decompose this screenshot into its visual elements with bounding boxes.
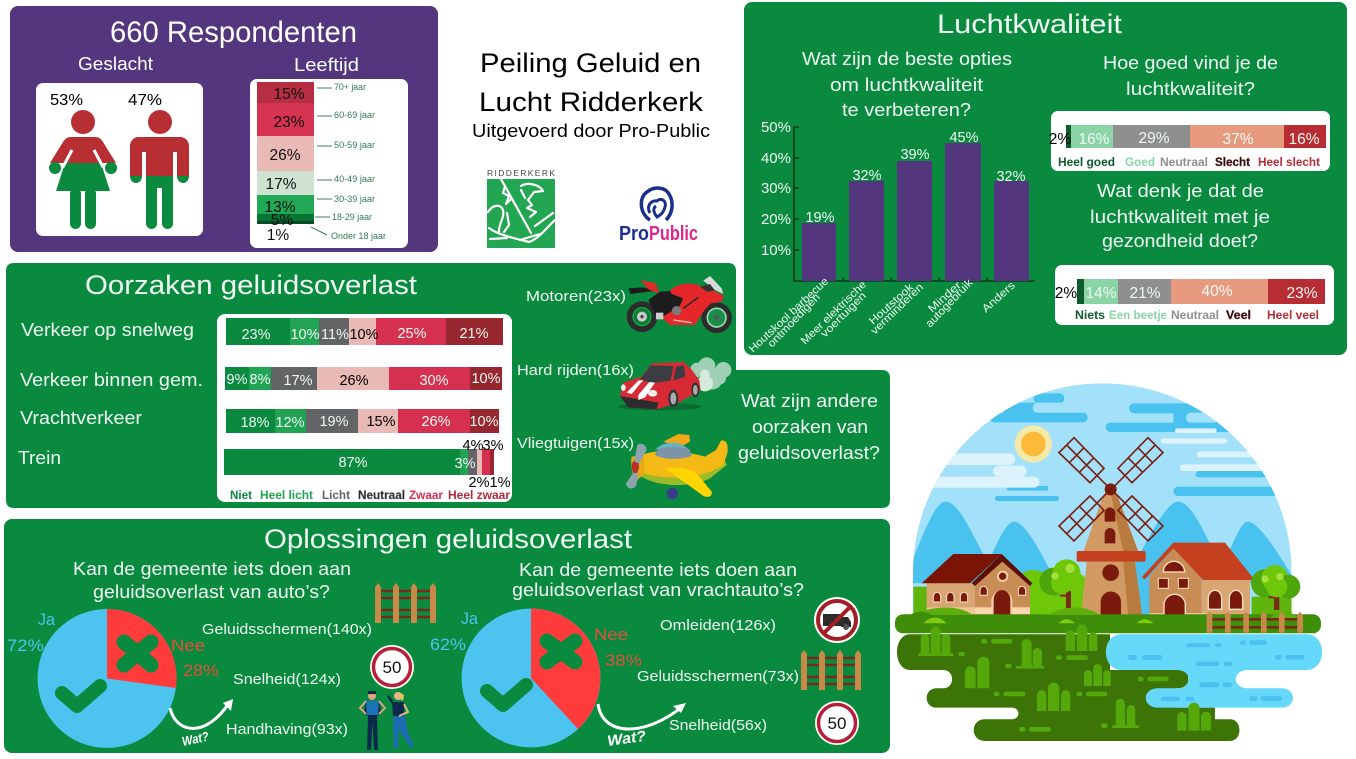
age label: 18-29 jaar: [332, 212, 372, 222]
legend: Niets: [1075, 310, 1105, 322]
row label: Verkeer binnen gem.: [20, 370, 203, 390]
heading: air quality: Luchtkwaliteit: [937, 9, 1123, 39]
label: diversion: Omleiden(126x): [660, 618, 776, 634]
legend: Veel: [1226, 310, 1251, 322]
legend: Heel goed: [1058, 157, 1115, 169]
bar: within municipality: 9%: [227, 372, 248, 388]
label: yes: Ja: [38, 610, 56, 629]
right barn: [1142, 543, 1253, 623]
bar: highway: 11%: [321, 327, 349, 343]
bar: freight: 19%: [319, 414, 349, 430]
value: 16%: [1078, 131, 1110, 148]
icon: man: [130, 110, 189, 229]
panel: respondents: [10, 6, 438, 252]
bar: freight: [226, 409, 499, 433]
axis label: 50%: [761, 119, 791, 136]
axis label: 40%: [761, 150, 791, 167]
question: other causes: geluidsoverlast?: [738, 442, 880, 463]
logo: ProPublic: Pro: [619, 223, 649, 245]
legend: causes: Licht: [322, 490, 350, 502]
question: trucks: [512, 560, 804, 600]
logo: ProPublic: Public: [649, 223, 698, 245]
icon: police officers: [360, 691, 414, 750]
value: 23%: [1286, 285, 1318, 302]
icon: speed sign 50: [815, 701, 859, 745]
stacked bar: health: [1055, 265, 1334, 325]
value: 19%: [805, 210, 835, 226]
question: other causes: oorzaken van: [752, 416, 868, 437]
icon: motorcycle: [627, 276, 732, 333]
value: 18-29: 5%: [271, 212, 293, 229]
bar: within municipality: 10%: [471, 371, 501, 387]
icon: speed sign 50: [370, 645, 414, 689]
label: 72 percent: 72%: [7, 636, 44, 655]
legend: Slecht: [1215, 157, 1250, 169]
bar: highway: 25%: [397, 326, 427, 342]
subtitle: Uitgevoerd door Pro-Public: [472, 121, 710, 141]
bar: train: 4%: [463, 438, 484, 454]
axis label: Houtstook: [867, 281, 916, 327]
label: 28 percent: 28%: [183, 661, 219, 680]
question: cars: geluidsoverlast van auto’s?: [93, 582, 330, 602]
legend: Heel slecht: [1258, 157, 1320, 169]
icon: check: [62, 686, 100, 706]
value: 2%: [1049, 131, 1071, 148]
pie chart: cars: [38, 609, 177, 748]
bar: highway: 23%: [241, 327, 271, 343]
bar: highway: 21%: [459, 326, 489, 342]
icon: cross: [547, 641, 575, 662]
bar: train: 2%: [469, 475, 490, 491]
value: 40%: [1201, 283, 1233, 300]
icon: plane: [626, 434, 728, 499]
age chart: [250, 79, 408, 248]
bar: within municipality: 30%: [419, 373, 449, 389]
fence: [1207, 612, 1303, 633]
stacked bar: rating: [1049, 111, 1330, 171]
axis label: ontmoedigen: [766, 291, 823, 350]
logo: Ridderkerk: RIDDERKERK: [487, 168, 555, 178]
bar: within municipality: 26%: [339, 373, 369, 389]
label: speeding: Hard rijden(16x): [517, 363, 634, 379]
question: best options: Wat zijn de beste opties: [802, 48, 1012, 69]
bar: train: 87%: [338, 455, 368, 471]
label: noise barriers: Geluidsschermen(73x): [637, 669, 799, 685]
axis label: Anders: [980, 279, 1018, 315]
tree: [1039, 559, 1087, 610]
value: 40-49: 17%: [265, 176, 297, 193]
main title: Peiling Geluid en: [480, 48, 701, 78]
icon: woman: [49, 110, 117, 229]
value: 2%: [1055, 285, 1077, 302]
question: trucks: geluidsoverlast van vrachtauto’s?: [512, 580, 804, 600]
bar: train: [224, 438, 511, 491]
water: [1106, 634, 1322, 708]
axis label: 30%: [761, 180, 791, 197]
legend: causes: Zwaar: [409, 490, 444, 502]
value: 30-39: 13%: [264, 199, 296, 216]
bar chart: options: [747, 119, 1035, 355]
icon: speed sign 50: 50: [383, 658, 401, 677]
grass tufts: [918, 625, 1211, 731]
label: 62 percent: 62%: [430, 635, 466, 654]
heading: gender: Geslacht: [78, 54, 153, 74]
arrow: cars: [170, 699, 233, 749]
stacked bars: causes: [217, 314, 512, 502]
label: 38 percent: 38%: [605, 651, 642, 670]
label: no: Nee: [171, 636, 205, 655]
label: yes: Ja: [461, 609, 479, 628]
question: other causes: Wat zijn andere: [741, 390, 878, 411]
age label: 30-39 jaar: [334, 194, 375, 204]
bar: train: 1%: [490, 475, 511, 491]
label: enforcement: Handhaving(93x): [226, 722, 348, 738]
row label: Trein: [18, 448, 61, 468]
arrow: trucks: [598, 703, 686, 750]
axis label: Houtskool barbecue: [747, 275, 831, 355]
label: 47 percent: 47%: [128, 92, 162, 109]
legend: Een beetje: [1109, 310, 1167, 322]
panel: solutions: [4, 519, 890, 753]
heading: solutions: Oplossingen geluidsoverlast: [264, 524, 633, 554]
axis label: Meer elektrische: [799, 279, 869, 347]
icon: fence: [801, 650, 861, 690]
tree: [1251, 565, 1300, 610]
label: 53 percent: 53%: [50, 92, 83, 109]
question: cars: Kan de gemeente iets doen aan: [73, 559, 351, 579]
value: 50-59: 26%: [269, 147, 301, 164]
icon: speed sign 50: 50: [828, 714, 846, 733]
icon: cross: [124, 642, 151, 665]
legend: causes: Heel licht: [260, 490, 313, 502]
legend: causes: Niet: [230, 490, 252, 502]
bar: freight: 18%: [240, 415, 270, 431]
icon: no trucks sign: [814, 597, 860, 643]
gender chart: [36, 83, 203, 236]
value: 39%: [900, 147, 930, 163]
question: health: gezondheid doet?: [1102, 230, 1258, 251]
heading: causes: Oorzaken geluidsoverlast: [85, 270, 418, 300]
question: rating: luchtkwaliteit?: [1126, 78, 1255, 99]
pie chart: trucks: [462, 608, 600, 748]
age label: 70+ jaar: [334, 82, 366, 92]
label: what: Wat?: [181, 729, 210, 749]
bar: freight: 26%: [421, 414, 451, 430]
heading: 660 respondents: 660 Respondenten: [110, 16, 357, 49]
row label: Verkeer op snelweg: [21, 320, 194, 340]
label: speed: Snelheid(124x): [233, 672, 341, 688]
question: cars: [73, 559, 351, 602]
main title: [472, 48, 710, 141]
label: aircraft: Vliegtuigen(15x): [517, 436, 634, 452]
windmill: [1059, 438, 1163, 617]
icon: check: [487, 685, 526, 705]
value: 70+: 15%: [273, 86, 305, 103]
label: motorcycles: Motoren(23x): [526, 289, 626, 305]
value: 60-69: 23%: [273, 114, 305, 131]
ground: [895, 607, 1322, 741]
age label: 50-59 jaar: [334, 140, 375, 150]
age label: Onder 18 jaar: [331, 231, 386, 241]
question: best options: [802, 48, 1012, 120]
value: 32%: [996, 169, 1026, 185]
value: 45%: [949, 130, 979, 146]
question: best options: om luchtkwaliteit: [830, 74, 983, 95]
legend: causes: Neutraal: [358, 490, 405, 502]
logo: ProPublic: [619, 188, 698, 245]
legend: causes: Heel zwaar: [448, 490, 511, 502]
value: 14%: [1085, 285, 1117, 302]
bar: train: 3%: [455, 456, 476, 472]
axis label: 10%: [761, 242, 791, 259]
age label: 60-69 jaar: [334, 110, 375, 120]
label: no: Nee: [594, 625, 628, 644]
question: health: Wat denk je dat de: [1097, 180, 1264, 201]
label: noise barriers: Geluidsschermen(140x): [202, 622, 372, 638]
bar: train: 3%: [483, 438, 504, 454]
axis label: 20%: [761, 211, 791, 228]
value: 21%: [1129, 285, 1161, 302]
legend: Heel veel: [1267, 310, 1319, 322]
value: 37%: [1222, 131, 1254, 148]
bar: highway: 10%: [290, 327, 320, 343]
legend: Neutraal: [1160, 157, 1208, 169]
value: 32%: [852, 168, 882, 184]
question: health: luchtkwaliteit met je: [1090, 206, 1270, 227]
illustration: village landscape with windmill: [895, 380, 1322, 741]
bar: freight: 12%: [275, 415, 305, 431]
bar: highway: 10%: [349, 327, 379, 343]
legend: Neutraal: [1171, 310, 1219, 322]
bar: within municipality: 8%: [250, 372, 271, 388]
legend: causes: [230, 490, 511, 502]
panel: causes of noise: [6, 263, 890, 508]
question: best options: te verbeteren?: [842, 99, 971, 120]
bar: freight: 15%: [366, 414, 396, 430]
logo: Ridderkerk: [487, 168, 555, 248]
bar: highway: [226, 318, 503, 345]
question: trucks: Kan de gemeente iets doen aan: [519, 560, 797, 580]
question: other causes: [738, 390, 880, 463]
label: what: Wat?: [606, 728, 647, 750]
label: speed: Snelheid(56x): [669, 718, 767, 734]
axis label: Minder: [926, 279, 964, 315]
icon: fence: [375, 583, 436, 623]
value: 29%: [1138, 130, 1170, 147]
axis label: verminderen: [869, 281, 926, 337]
question: rating: [1103, 52, 1278, 99]
question: rating: Hoe goed vind je de: [1103, 52, 1278, 73]
icon: car: [618, 357, 731, 410]
row label: Vrachtverkeer: [20, 408, 142, 428]
heading: age: Leeftijd: [294, 55, 359, 75]
age label: 40-49 jaar: [334, 174, 375, 184]
question: health: [1090, 180, 1270, 251]
left house: [922, 554, 1032, 615]
axis label: voertuigen: [819, 290, 869, 340]
value: under 18: 1%: [267, 227, 289, 244]
legend: Goed: [1125, 157, 1155, 169]
panel: air quality: [744, 2, 1347, 355]
axis label: autogebruik: [924, 277, 976, 330]
bar: within municipality: 17%: [283, 373, 313, 389]
bar: freight: 10%: [469, 414, 499, 430]
bar: within municipality: [225, 367, 502, 390]
value: 16%: [1288, 131, 1320, 148]
main title: Lucht Ridderkerk: [479, 87, 704, 117]
